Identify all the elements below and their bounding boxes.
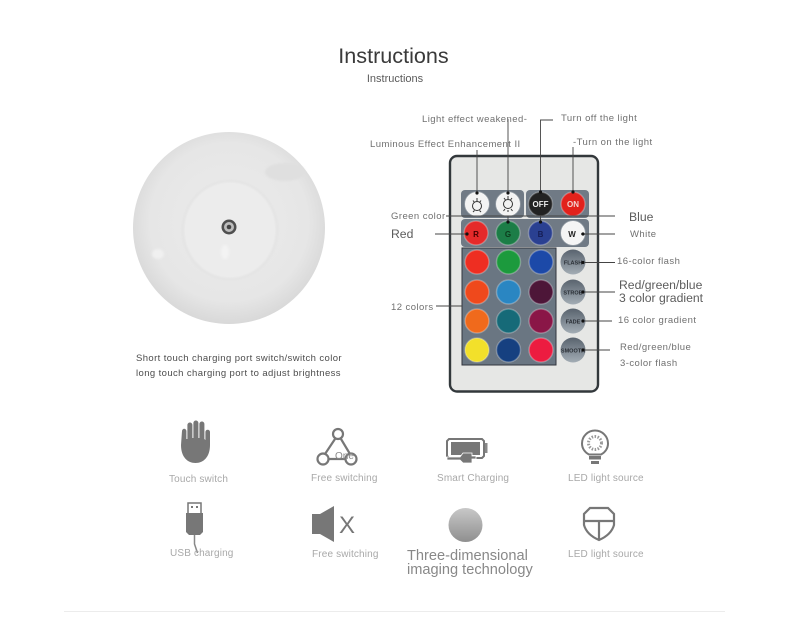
remote labels: 3-color flash bbox=[620, 358, 678, 369]
RGBW buttons: G bbox=[505, 230, 511, 239]
moon lamp caption: long touch charging port to adjust brightness bbox=[136, 368, 341, 379]
12 color buttons bbox=[465, 250, 553, 362]
feature: touch switch bbox=[169, 420, 228, 485]
mode buttons: FADE bbox=[566, 320, 581, 326]
mode buttons: FLASH bbox=[564, 260, 582, 266]
feature: smart charging bbox=[437, 439, 509, 484]
feature: USB charging: USB charging bbox=[170, 548, 234, 559]
brightness and power buttons bbox=[465, 192, 585, 216]
remote labels: 16-color flash bbox=[617, 256, 680, 267]
remote labels: Light effect weakened- bbox=[422, 114, 527, 125]
callout lines bbox=[435, 119, 615, 352]
feature: 3D imaging: imaging technology bbox=[407, 562, 533, 578]
remote labels: White bbox=[630, 229, 657, 240]
remote labels: Blue bbox=[629, 210, 654, 224]
feature: touch switch: Touch switch bbox=[169, 474, 228, 485]
mode buttons: STROB bbox=[563, 290, 583, 296]
remote labels: Red/green/blue bbox=[620, 342, 691, 353]
feature: LED shield: LED light source bbox=[568, 549, 644, 560]
remote labels: Luminous Effect Enhancement II bbox=[370, 139, 521, 150]
RGBW buttons: W bbox=[568, 230, 576, 239]
feature: 3D imaging: Three-dimensional bbox=[407, 548, 528, 564]
feature: free switching triangle: Free switching bbox=[311, 473, 378, 484]
feature: USB charging bbox=[170, 503, 234, 559]
feature: LED bulb: LED light source bbox=[568, 473, 644, 484]
remote control bbox=[450, 156, 598, 392]
feature: LED shield bbox=[568, 508, 644, 560]
remote labels: 3 color gradient bbox=[619, 291, 704, 305]
top button panels bbox=[461, 190, 589, 365]
remote labels: Red bbox=[391, 227, 413, 241]
moon lamp image bbox=[133, 132, 325, 324]
remote labels bbox=[370, 113, 704, 369]
remote labels: Green color bbox=[391, 211, 446, 222]
feature: silent bbox=[312, 506, 379, 560]
title: Instructions bbox=[338, 43, 449, 68]
feature: free switching triangle bbox=[311, 429, 378, 484]
mode buttons bbox=[560, 250, 586, 362]
bottom divider bbox=[64, 611, 725, 612]
brightness and power buttons: ON bbox=[567, 200, 579, 209]
RGBW buttons: B bbox=[538, 230, 544, 239]
remote labels: Turn off the light bbox=[561, 113, 637, 124]
moon lamp caption bbox=[136, 353, 342, 379]
feature: smart charging: Smart Charging bbox=[437, 473, 509, 484]
RGBW buttons bbox=[464, 221, 585, 245]
remote labels: -Turn on the light bbox=[573, 137, 653, 148]
moon lamp caption: Short touch charging port switch/switch color bbox=[136, 353, 342, 364]
remote labels: Red/green/blue bbox=[619, 278, 703, 292]
RGBW buttons: R bbox=[473, 230, 479, 239]
remote labels: 16 color gradient bbox=[618, 315, 696, 326]
mode buttons: SMOOTH bbox=[561, 348, 585, 354]
feature: silent: X bbox=[339, 512, 355, 539]
brightness and power buttons: OFF bbox=[532, 200, 549, 209]
subtitle: Instructions bbox=[367, 73, 424, 85]
feature: free switching triangle: One bbox=[335, 451, 354, 462]
feature: silent: Free switching bbox=[312, 549, 379, 560]
feature: LED bulb bbox=[568, 431, 644, 484]
feature: 3D imaging bbox=[407, 508, 533, 578]
remote labels: 12 colors bbox=[391, 302, 434, 313]
